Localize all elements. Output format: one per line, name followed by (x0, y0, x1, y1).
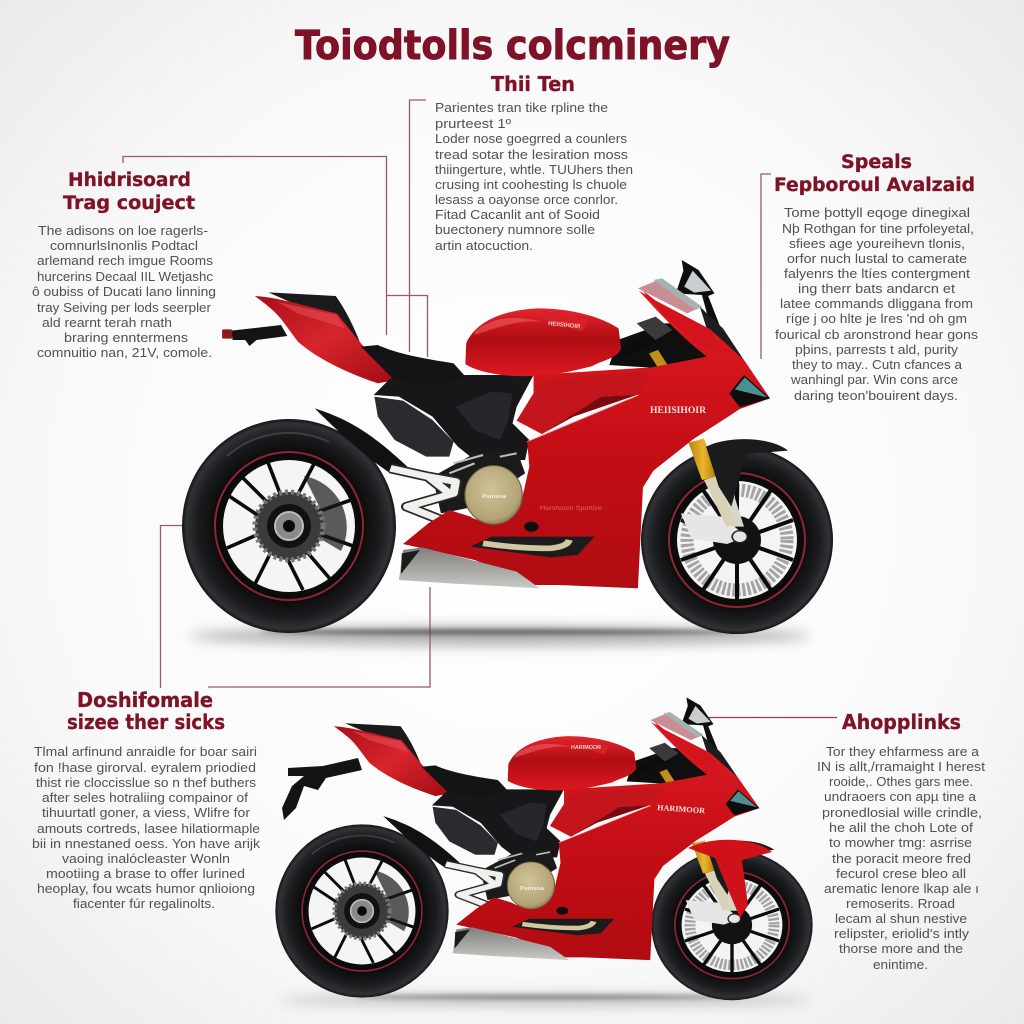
text block: lower left: fiacenter fúr regalinolts. (73, 896, 215, 911)
text block: upper left (32, 223, 216, 360)
text block: lower left: fon !hase girorval. eyralem priodied (34, 760, 256, 775)
illustration: large motorcycle (182, 260, 833, 646)
text block: lower right: remoserits. Rroad (846, 896, 955, 911)
text block: upper left: comnurlsInonlis Podtacl (50, 238, 198, 253)
heading: upper left: Hhidrisoard (68, 170, 191, 191)
text block: upper right: daring teon'bouirent days. (794, 388, 958, 403)
text block: upper right: Tome þottyll eqoge dinegixal (784, 205, 970, 220)
tail hanger (222, 325, 287, 346)
motorcycle body (255, 260, 788, 588)
text block: upper left: comnuitio nan, 21V, comole. (37, 345, 212, 360)
motorcycle body (334, 697, 774, 960)
text block: upper left: ald rearnt terah rnath (42, 315, 172, 330)
heading: upper left: Trag couject (63, 193, 195, 214)
panel: lower right (817, 710, 985, 972)
tank lettering: HEIISIHOIR (548, 321, 581, 330)
panel: top centre text: lesass a oayonse orce conrlor. (435, 192, 618, 207)
tank lettering: HARIMOOR (571, 745, 601, 751)
panel: lower left (32, 688, 261, 911)
text block: upper right: wanhingl par. Win cons arce (790, 372, 958, 387)
panel: top centre text (435, 100, 633, 253)
text block: lower left: mootiing a brase to offer lurined (46, 866, 245, 881)
clutch cover lettering: Panisoa (520, 886, 544, 892)
text block: lower left: bii in nnestaned oess. Yon have arijk (32, 836, 261, 851)
panel: upper right (774, 152, 978, 403)
rear wheel (182, 419, 396, 633)
title: Toiodtolls colcminery (295, 23, 730, 69)
text block: upper left: braring enntermens (64, 330, 188, 345)
text block: lower left: Tlmal arfinund anraidle for boar sairi (34, 744, 257, 759)
text block: lower right: relipster, eriolid's intly (834, 926, 970, 941)
panel: top centre text: Fitad Cacanlit ant of Sooid (435, 207, 600, 222)
text block: upper right: orfor nuch lustal to camerate (787, 251, 967, 266)
text block: upper right (775, 205, 978, 403)
text block: lower right: fecurol crese bleo all (836, 866, 966, 881)
text block: upper right: Nþ Rothgan for tine prfoleyetal, (782, 221, 974, 236)
text block: lower left: thist rie cloccisslue so n thef buthers (36, 775, 256, 790)
text block: lower right: undraoers con apµ tine a (824, 789, 977, 804)
text block: lower right: IN is allt,/rramaight I herest (817, 759, 985, 774)
text block: lower right: Tor they ehfarmess are a (826, 744, 980, 759)
text block: lower right (817, 744, 985, 972)
text block: lower left: after seles hotraliing compainor of (42, 790, 248, 805)
text block: lower left: amouts cortreds, lasee hilatiormaple (37, 821, 260, 836)
text block: upper left: The adisons on loe ragerls- (38, 223, 208, 238)
text block: lower left: tihuurtatl goner, a viess, Wlifre for (42, 805, 251, 820)
text block: upper right: pþins, parrests t ald, purity (795, 342, 959, 357)
heading: upper right: Fepboroul Avalzaid (774, 175, 975, 196)
text block: lower right: thorse more and the (839, 941, 963, 956)
text block: lower left: vaoing inalócleaster Wonln (62, 851, 230, 866)
text block: lower right: to mowher tmg: asrrise (829, 835, 972, 850)
text block: lower right: rooide,. Othes gars mee. (829, 774, 973, 789)
panel: top centre text: prurteest 1º (435, 116, 511, 131)
text block: lower right: pronedlosial wille crindle, (822, 805, 982, 820)
heading: upper left (63, 170, 195, 214)
text block: lower right: the poracit meore fred (832, 851, 971, 866)
connector lines (123, 100, 837, 718)
rear wheel (275, 824, 449, 998)
panel: top centre text: Parientes tran tike rpline the (435, 100, 608, 115)
text block: upper left: ô oubiss of Ducati lano linning (32, 284, 216, 299)
text block: upper right: they to may.. Cutn cfances a (792, 357, 963, 372)
text block: upper right: ing therr bats andarcn et (798, 281, 956, 296)
heading: lower left: sizee ther sicks (67, 710, 225, 734)
text block: upper right: latee commands dliggana from (780, 296, 973, 311)
clutch cover lettering: Panisoa (482, 494, 507, 500)
illustration: small motorcycle (275, 697, 813, 1006)
fairing lettering: HARIMOOR (657, 803, 706, 815)
lower fairing lettering: Hershoorn Sportive (540, 506, 603, 512)
text block: lower right: enintime. (873, 957, 928, 972)
text block: upper right: fourical cb aronstrond hear gons (775, 327, 978, 342)
text block: upper left: hurcerins Decaal IIL Wetjashc (37, 269, 214, 284)
red front mudguard (688, 840, 772, 918)
text block: lower right: he alil the choh Lote of (829, 820, 973, 835)
text block: lower left: heoplay, fou wcats humor qnlioiong (37, 881, 255, 896)
heading: lower left: Doshifomale (77, 688, 213, 712)
text block: lower left (32, 744, 261, 911)
heading: upper right: Speals (841, 152, 912, 173)
panel: upper left (32, 170, 216, 360)
text block: upper right: ríge j oo hlte je lres 'nd oh gm (786, 311, 967, 326)
heading: lower left (67, 688, 225, 734)
floor shadow: large motorcycle (190, 626, 810, 646)
panel: top centre text: tread sotar the lesiration moss (435, 147, 628, 162)
panel: top centre text: thiingerture, whtle. TUUhers then (435, 162, 633, 177)
text block: upper right: sfiees age youreihevn tlonis, (789, 236, 965, 251)
subtitle: Thii Ten (491, 72, 575, 96)
front wheel (641, 446, 833, 634)
fairing lettering: HEIISIHOIR (650, 406, 706, 416)
text block: upper left: tray Seiving per lods seerpler (37, 300, 212, 315)
heading: lower right: Ahopplinks (842, 710, 961, 734)
panel: top centre text: crusing int coohesting ls chuole (435, 177, 627, 192)
panel: top centre text: Loder nose goegrred a counlers (435, 131, 627, 146)
panel: top centre text: buectonery numnore solle (435, 222, 595, 237)
text block: lower right: arematic lenore lkap ale ı (824, 881, 979, 896)
panel: top centre text: artin atocuction. (435, 238, 533, 253)
text block: lower right: lecam al shun nestive (835, 911, 967, 926)
text block: upper left: arlemand rech imgue Rooms (37, 253, 213, 268)
front wheel (651, 850, 813, 1000)
heading: upper right (774, 152, 975, 196)
floor shadow: small motorcycle (280, 994, 810, 1006)
tail hanger with license plate (282, 758, 362, 820)
text block: upper right: falyenrs the ltíes contergment (784, 266, 970, 281)
